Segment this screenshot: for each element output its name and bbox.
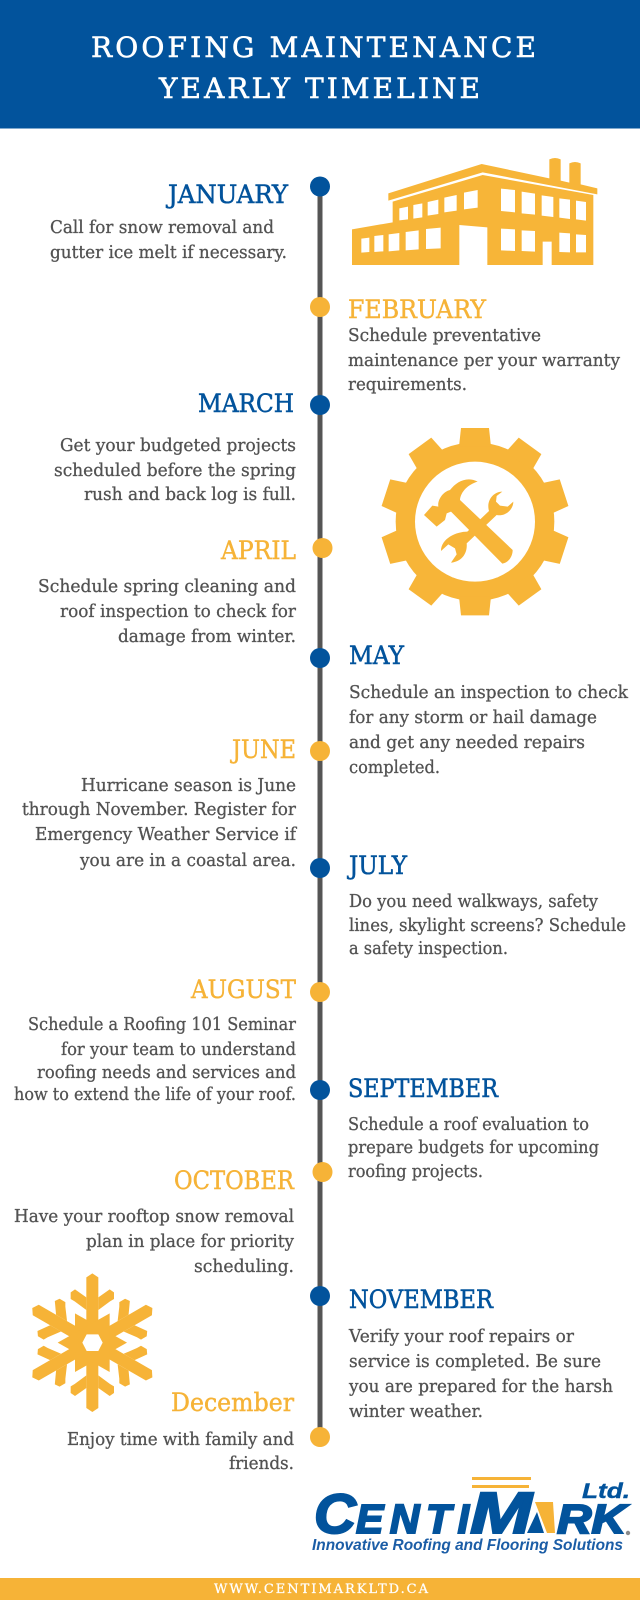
July: Do you need walkways, safety bbox=[349, 891, 599, 912]
CentiMark logo: RK bbox=[557, 1496, 630, 1542]
January: gutter ice melt if necessary. bbox=[50, 242, 287, 263]
May bbox=[349, 641, 629, 778]
July: JULY bbox=[346, 851, 407, 880]
title: ROOFING MAINTENANCE bbox=[91, 31, 536, 64]
June bbox=[22, 735, 297, 871]
April: Schedule spring cleaning and bbox=[38, 576, 296, 597]
title: YEARLY TIMELINE bbox=[158, 72, 480, 105]
September bbox=[348, 1074, 599, 1182]
February bbox=[348, 295, 621, 395]
icon: snowflake bbox=[21, 1273, 163, 1412]
June: Emergency Weather Service if bbox=[35, 824, 297, 845]
November: Verify your roof repairs or bbox=[348, 1326, 574, 1347]
October: OCTOBER bbox=[174, 1166, 295, 1195]
February: maintenance per your warranty bbox=[348, 350, 621, 371]
February: requirements. bbox=[348, 374, 467, 395]
February: FEBRUARY bbox=[348, 295, 486, 324]
website url: WWW.CENTIMARKLTD.CA bbox=[214, 1582, 429, 1597]
November: service is completed. Be sure bbox=[349, 1351, 601, 1372]
timeline dots bbox=[310, 176, 332, 1447]
March: Get your budgeted projects bbox=[60, 435, 296, 456]
December: December bbox=[171, 1388, 294, 1417]
timeline spine bbox=[318, 186, 322, 1436]
October: plan in place for priority bbox=[86, 1231, 295, 1252]
July: a safety inspection. bbox=[349, 938, 508, 959]
September: roofing projects. bbox=[348, 1161, 483, 1182]
CentiMark logo bbox=[312, 1477, 630, 1554]
footer bar bbox=[0, 1578, 640, 1600]
March: scheduled before the spring bbox=[54, 460, 296, 481]
May: MAY bbox=[349, 641, 404, 670]
CentiMark logo: M bbox=[470, 1481, 534, 1546]
May: completed. bbox=[349, 757, 440, 778]
August: Schedule a Roofing 101 Seminar bbox=[28, 1014, 296, 1035]
August: AUGUST bbox=[190, 975, 296, 1004]
October bbox=[14, 1166, 295, 1277]
November: NOVEMBER bbox=[349, 1285, 494, 1314]
May: for any storm or hail damage bbox=[349, 707, 597, 728]
August: how to extend the life of your roof. bbox=[14, 1084, 296, 1105]
December: friends. bbox=[229, 1453, 294, 1474]
June: you are in a coastal area. bbox=[79, 850, 296, 871]
January bbox=[50, 180, 288, 263]
March: rush and back log is full. bbox=[84, 484, 296, 505]
CentiMark logo: Ltd. bbox=[582, 1480, 630, 1503]
September: prepare budgets for upcoming bbox=[348, 1137, 599, 1158]
December bbox=[67, 1388, 294, 1474]
December: Enjoy time with family and bbox=[67, 1429, 294, 1450]
August bbox=[14, 975, 296, 1105]
August: roofing needs and services and bbox=[37, 1062, 296, 1083]
April: roof inspection to check for bbox=[60, 601, 296, 622]
title bbox=[91, 31, 536, 105]
icon: building bbox=[352, 158, 597, 265]
July bbox=[346, 851, 626, 959]
November: you are prepared for the harsh bbox=[348, 1376, 613, 1397]
June: through November. Register for bbox=[22, 799, 296, 820]
October: Have your rooftop snow removal bbox=[14, 1206, 294, 1227]
March bbox=[54, 389, 296, 505]
January: JANUARY bbox=[165, 180, 288, 209]
April bbox=[38, 536, 296, 647]
October: scheduling. bbox=[194, 1256, 294, 1277]
June: JUNE bbox=[229, 735, 296, 764]
CentiMark logo: ENTI bbox=[356, 1496, 471, 1542]
November bbox=[348, 1285, 613, 1422]
February: Schedule preventative bbox=[348, 325, 541, 346]
icon: gear with hammer and wrench bbox=[381, 428, 569, 615]
April: damage from winter. bbox=[118, 626, 296, 647]
CentiMark logo: Innovative Roofing and Flooring Solutions bbox=[312, 1537, 623, 1554]
May: and get any needed repairs bbox=[349, 732, 585, 753]
June: Hurricane season is June bbox=[81, 775, 296, 796]
November: winter weather. bbox=[349, 1401, 483, 1422]
May: Schedule an inspection to check bbox=[349, 682, 629, 703]
August: for your team to understand bbox=[61, 1039, 296, 1060]
CentiMark logo: C bbox=[314, 1482, 358, 1545]
September: SEPTEMBER bbox=[348, 1074, 499, 1103]
January: Call for snow removal and bbox=[50, 217, 274, 238]
September: Schedule a roof evaluation to bbox=[348, 1114, 589, 1135]
April: APRIL bbox=[220, 536, 296, 565]
header banner bbox=[0, 0, 640, 128]
March: MARCH bbox=[198, 389, 294, 418]
